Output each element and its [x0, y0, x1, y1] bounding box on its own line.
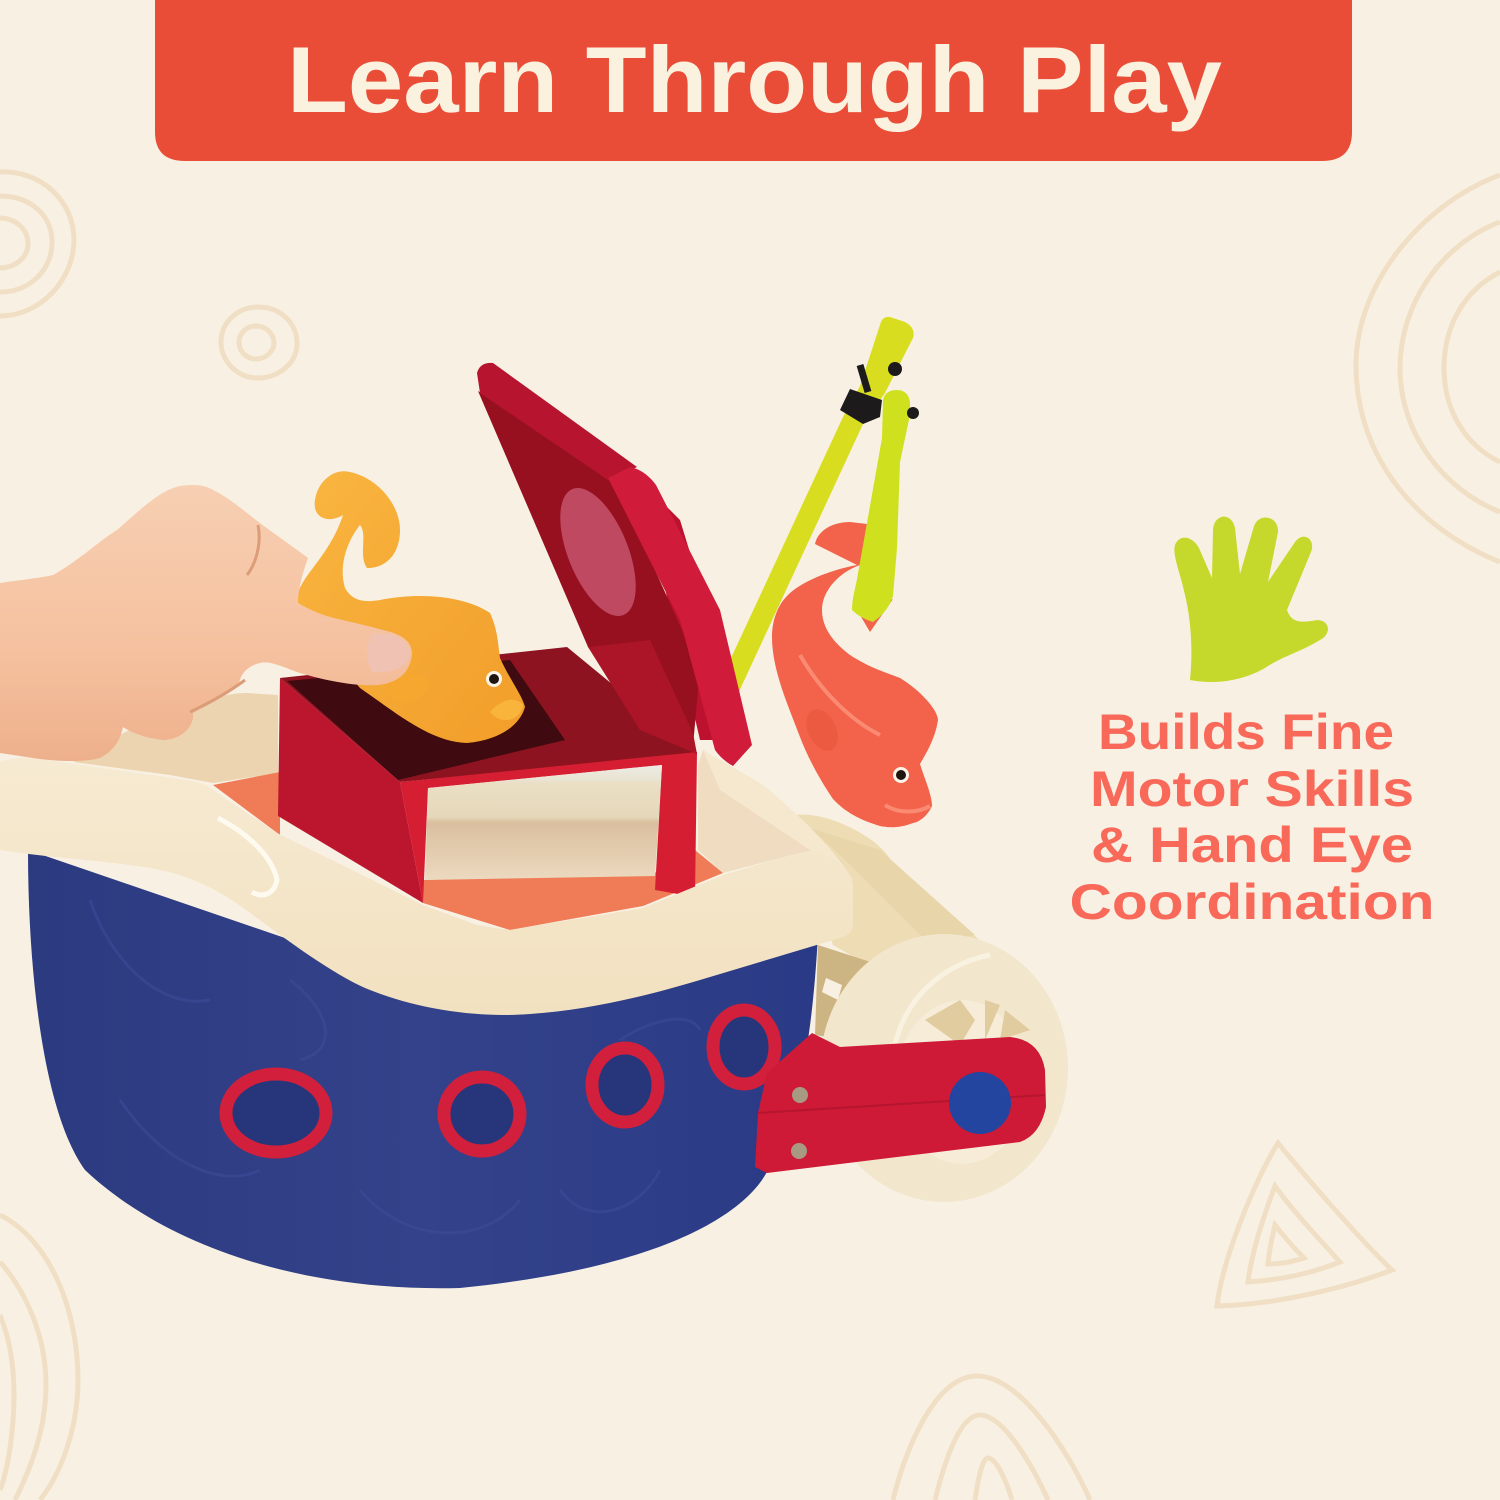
- icon: green hand: [1174, 517, 1328, 682]
- red hatch lid: [477, 363, 752, 766]
- right inner wall of the boat: [698, 750, 853, 880]
- red paddle bracket: [755, 1033, 1046, 1173]
- hand: [0, 485, 412, 761]
- title banner: [155, 0, 1352, 161]
- boat floor: [213, 772, 723, 930]
- fishing rod: [725, 317, 914, 696]
- red-orange fish: [772, 522, 938, 827]
- cream boat rim: [0, 758, 853, 1015]
- skill text: Coordination: [1070, 874, 1434, 930]
- skill text: Builds Fine: [1098, 704, 1394, 760]
- title: Learn Through Play: [287, 27, 1222, 132]
- skill text: Motor Skills: [1090, 761, 1414, 817]
- orange fish: [298, 471, 525, 743]
- red cabin box: [278, 647, 697, 903]
- fishing rod loop and knot: [840, 362, 919, 622]
- toy boat illustration: [0, 317, 1068, 1288]
- boat deck back wall: [73, 693, 278, 783]
- skill text: [1070, 704, 1434, 930]
- porthole rings: [226, 1010, 775, 1152]
- rear wheel assembly: [793, 814, 1068, 1202]
- skill text: & Hand Eye: [1091, 817, 1413, 873]
- boat hull: [28, 850, 818, 1288]
